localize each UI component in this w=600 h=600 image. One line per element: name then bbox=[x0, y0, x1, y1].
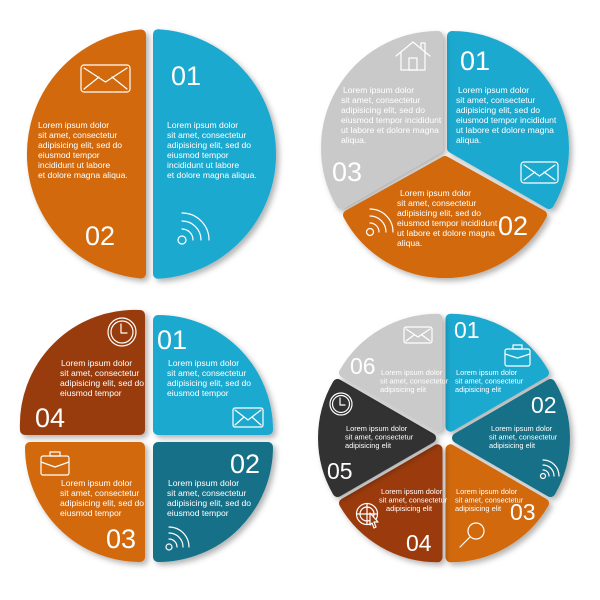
text block: eiusmod tempor incididunt bbox=[456, 115, 557, 125]
text block: eiusmod tempor bbox=[60, 508, 122, 518]
segment 04 brown bbox=[344, 449, 448, 557]
segment 02 orange bbox=[348, 161, 542, 273]
segment 05 dark bbox=[323, 384, 431, 492]
text block: aliqua. bbox=[397, 238, 422, 248]
segment 01 blue bbox=[158, 34, 271, 274]
number 02: 02 bbox=[85, 221, 115, 251]
segment 02 orange bbox=[32, 34, 141, 274]
text block: sit amet, consectetur bbox=[345, 432, 414, 442]
text block: eiusmod tempor bbox=[167, 388, 229, 398]
text block: sit amet, consectetur bbox=[60, 368, 139, 378]
text block: Lorem ipsum dolor bbox=[38, 120, 109, 130]
text block: adipisicing elit, sed do bbox=[60, 378, 144, 388]
segment 06 gray bbox=[344, 319, 449, 427]
text block: adipisicing elit, sed do bbox=[341, 105, 425, 115]
text block: adipisicing elit bbox=[455, 385, 501, 394]
text block: ut labore et dolore magna bbox=[456, 125, 554, 135]
text block: Lorem ipsum dolor bbox=[168, 478, 239, 488]
text block: aliqua. bbox=[456, 135, 481, 145]
text block: adipisicing elit, sed do bbox=[456, 105, 540, 115]
text block: eiusmod tempor bbox=[167, 508, 229, 518]
number 03: 03 bbox=[510, 499, 536, 525]
text block: Lorem ipsum dolor bbox=[456, 487, 517, 496]
text block: sit amet, consectetur bbox=[167, 368, 246, 378]
text block: Lorem ipsum dolor bbox=[168, 358, 239, 368]
number 01: 01 bbox=[171, 61, 201, 91]
text block: adipisicing elit, sed do bbox=[38, 140, 122, 150]
text block: Lorem ipsum dolor bbox=[343, 85, 414, 95]
text block: adipisicing elit bbox=[455, 504, 501, 513]
text block: sit amet, consectetur bbox=[397, 198, 476, 208]
text block: Lorem ipsum dolor bbox=[381, 368, 442, 377]
text block: eiusmod tempor bbox=[60, 388, 122, 398]
text block: ut labore et dolore magna bbox=[397, 228, 495, 238]
panel: six-part circle bbox=[323, 317, 565, 557]
text block: eiusmod tempor incididunt bbox=[341, 115, 442, 125]
text block: adipisicing elit bbox=[386, 504, 432, 513]
text block: sit amet, consectetur bbox=[379, 496, 448, 504]
icon: wifi bbox=[166, 527, 189, 550]
number 02: 02 bbox=[498, 211, 528, 241]
text block: adipisicing elit, sed do bbox=[397, 208, 481, 218]
icon: clock bbox=[108, 318, 136, 346]
text block: sit amet, consectetur bbox=[60, 488, 139, 498]
text block: adipisicing elit, sed do bbox=[167, 498, 251, 508]
text block: adipisicing elit, sed do bbox=[60, 498, 144, 508]
text block: sit amet, consectetur bbox=[380, 376, 449, 386]
segment 04 dark red bbox=[25, 315, 144, 433]
text block: et dolore magna aliqua. bbox=[38, 170, 128, 180]
number 04: 04 bbox=[35, 403, 65, 433]
text block: sit amet, consectetur bbox=[456, 95, 535, 105]
text block: adipisicing elit bbox=[380, 385, 426, 394]
text block: Lorem ipsum dolor bbox=[346, 424, 407, 433]
text block: sit amet, consectetur bbox=[455, 376, 524, 386]
icon: envelope bbox=[404, 327, 432, 343]
icon: briefcase bbox=[505, 345, 530, 366]
text block: sit amet, consectetur bbox=[341, 95, 420, 105]
number 01: 01 bbox=[454, 317, 480, 343]
text block: adipisicing elit, sed do bbox=[167, 378, 251, 388]
panel: four-part circle bbox=[25, 315, 268, 557]
icon: magnifier bbox=[460, 523, 484, 547]
text block: Lorem ipsum dolor bbox=[381, 487, 442, 496]
text block: adipisicing elit bbox=[489, 441, 535, 450]
text block: aliqua. bbox=[341, 135, 366, 145]
number 03: 03 bbox=[106, 524, 136, 554]
text block: Lorem ipsum dolor bbox=[491, 424, 552, 433]
icon: clock bbox=[330, 393, 352, 415]
segment 03 orange bbox=[450, 449, 544, 557]
number 02: 02 bbox=[531, 392, 557, 418]
segment 03 orange bbox=[30, 447, 144, 557]
panel: two-part circle bbox=[32, 34, 271, 274]
icon: wifi bbox=[540, 460, 559, 478]
icon: envelope bbox=[81, 65, 130, 92]
icon: wifi bbox=[178, 213, 209, 244]
number 04: 04 bbox=[406, 530, 432, 556]
segment 02 teal bbox=[457, 384, 565, 492]
text block: ut labore et dolore magna bbox=[341, 125, 439, 135]
text block: incididunt ut labore bbox=[38, 160, 110, 170]
text block: Lorem ipsum dolor bbox=[400, 188, 471, 198]
text block: et dolore magna aliqua. bbox=[167, 170, 257, 180]
icon: globe bbox=[356, 504, 378, 528]
text block: Lorem ipsum dolor bbox=[61, 358, 132, 368]
text block: eiusmod tempor incididunt bbox=[397, 218, 498, 228]
icon: house bbox=[396, 42, 430, 70]
text block: adipisicing elit, sed do bbox=[167, 140, 251, 150]
text block: eiusmod tempor bbox=[38, 150, 100, 160]
text block: incididunt ut labore bbox=[167, 160, 239, 170]
text block: sit amet, consectetur bbox=[167, 488, 246, 498]
number 01: 01 bbox=[157, 325, 187, 355]
segment 01 blue bbox=[157, 320, 268, 430]
text block: Lorem ipsum dolor bbox=[167, 120, 238, 130]
icon: briefcase bbox=[41, 452, 69, 475]
number 06: 06 bbox=[350, 353, 376, 379]
text block: sit amet, consectetur bbox=[167, 130, 246, 140]
icon: wifi bbox=[366, 209, 393, 236]
number 05: 05 bbox=[327, 458, 353, 484]
segment 03 gray bbox=[326, 36, 442, 204]
text block: sit amet, consectetur bbox=[455, 496, 524, 504]
segment 01 blue bbox=[450, 317, 544, 427]
text block: adipisicing elit bbox=[345, 441, 391, 450]
segment 02 teal bbox=[158, 447, 268, 557]
text block: Lorem ipsum dolor bbox=[458, 85, 529, 95]
icon: envelope bbox=[521, 162, 558, 183]
number 03: 03 bbox=[332, 157, 362, 187]
panel: three-part circle bbox=[326, 36, 564, 273]
segment 01 blue bbox=[452, 36, 564, 204]
icon: envelope bbox=[233, 408, 263, 427]
text block: sit amet, consectetur bbox=[38, 130, 117, 140]
text block: eiusmod tempor bbox=[167, 150, 229, 160]
text block: Lorem ipsum dolor bbox=[61, 478, 132, 488]
text block: Lorem ipsum dolor bbox=[456, 368, 517, 377]
number 02: 02 bbox=[230, 449, 260, 479]
number 01: 01 bbox=[460, 46, 490, 76]
text block: sit amet, consectetur bbox=[489, 432, 558, 442]
